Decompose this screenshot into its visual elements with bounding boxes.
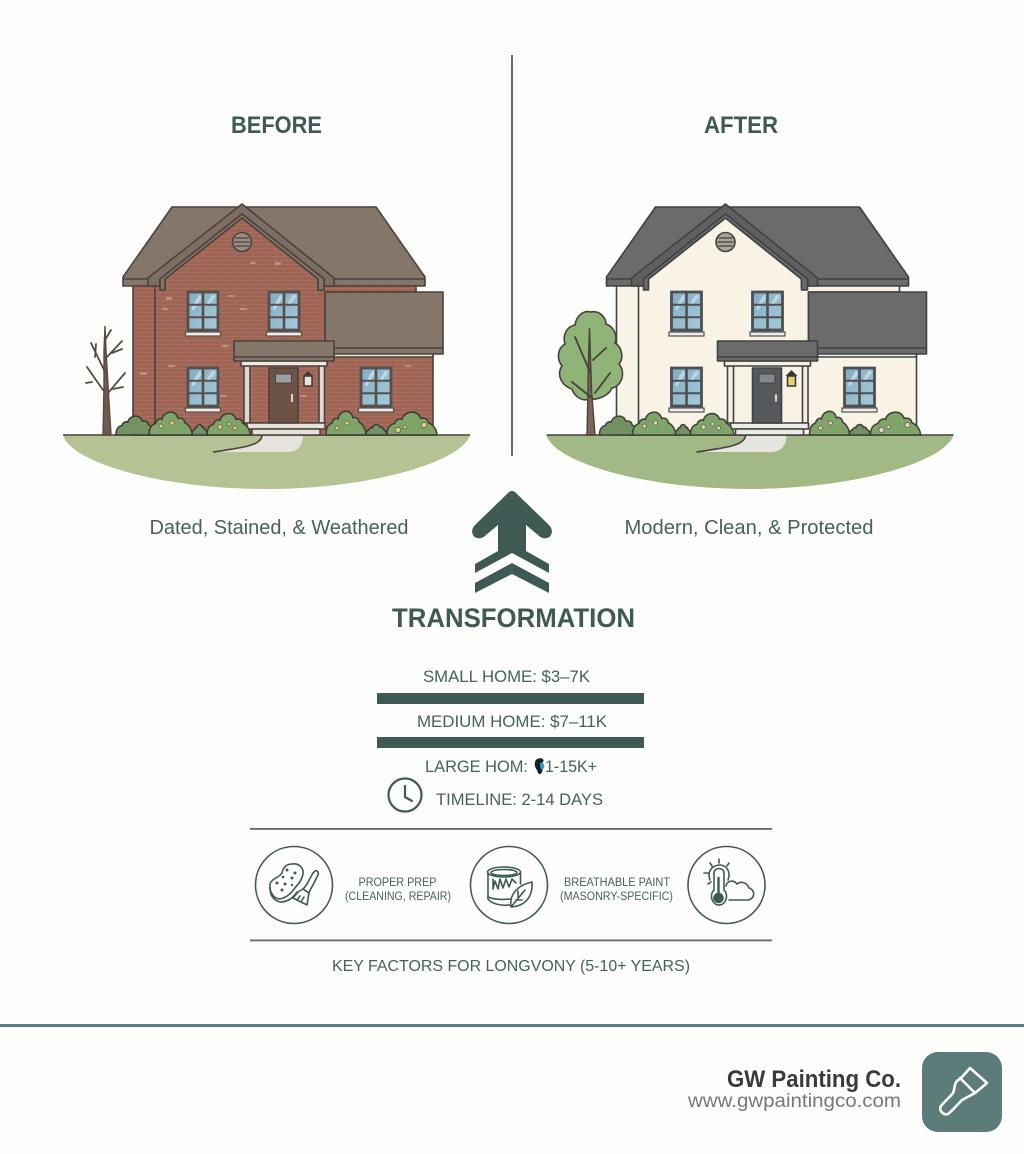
gable trim — [632, 204, 818, 286]
shrub flowers — [159, 421, 427, 433]
shrub flowers — [642, 421, 910, 433]
arrow: upward transformation — [472, 491, 552, 593]
cost: large home: 1-15K+ — [545, 757, 597, 776]
eave line — [606, 278, 908, 280]
walkway — [213, 435, 303, 452]
wall lantern — [303, 371, 313, 386]
walkway — [696, 435, 786, 452]
brick walls — [133, 218, 433, 435]
eave line — [123, 278, 425, 280]
front door — [752, 368, 782, 423]
porch — [234, 341, 334, 435]
gable trim — [148, 204, 334, 286]
leafy tree — [558, 312, 623, 435]
shrubs — [600, 411, 920, 435]
factor text: breathable paint — [560, 877, 673, 903]
footer rule — [0, 1024, 1024, 1027]
before caption: Dated, Stained, & Weathered — [150, 517, 408, 539]
heading: after: AFTER — [704, 112, 778, 139]
factor text: breathable paint: BREATHABLE PAINT — [564, 877, 670, 889]
bar: medium home — [377, 737, 644, 748]
main roof — [123, 207, 425, 286]
porch — [718, 341, 818, 435]
center divider — [511, 55, 513, 456]
factor text: breathable paint: (MASONRY-SPECIFIC) — [560, 891, 673, 903]
brick flecks — [140, 262, 411, 397]
windows — [669, 292, 877, 412]
wall lantern — [786, 370, 798, 386]
rule above factors — [250, 828, 772, 830]
timeline text: TIMELINE: 2-14 DAYS — [436, 790, 603, 809]
icon: paint can and leaf — [470, 846, 548, 924]
main roof — [606, 207, 908, 286]
company website: www.gwpaintingco.com — [687, 1091, 901, 1112]
factor text: proper prep: PROPER PREP — [358, 877, 437, 889]
lawn — [546, 435, 954, 489]
windows — [186, 292, 394, 412]
cost: large home: LARGE HOM: — [425, 757, 528, 776]
company name: GW Painting Co. — [727, 1066, 901, 1093]
front door — [269, 368, 298, 423]
key factors caption: KEY FACTORS FOR LONGVONY (5-10+ YEARS) — [332, 958, 690, 975]
bar: small home — [377, 693, 644, 704]
cost: large home — [425, 757, 597, 776]
attic vent — [716, 232, 735, 252]
garage roof — [325, 292, 443, 357]
cost: medium home: MEDIUM HOME: $7–11K — [417, 712, 608, 731]
bare tree — [86, 326, 125, 435]
icon: sponge and brush — [256, 846, 332, 924]
shrubs — [116, 411, 437, 435]
after caption: Modern, Clean, & Protected — [624, 517, 874, 539]
icon: thermometer, sun and cloud — [688, 846, 765, 924]
heading: before: BEFORE — [231, 112, 322, 139]
rule below factors — [250, 940, 772, 941]
garage roof — [808, 292, 926, 357]
panel: before house illustration — [63, 204, 470, 489]
factor text: proper prep — [345, 877, 451, 903]
transformation title: TRANSFORMATION — [392, 603, 635, 633]
factor text: proper prep: (CLEANING, REPAIR) — [345, 891, 451, 903]
attic vent — [232, 232, 252, 252]
panel: after house illustration — [546, 204, 954, 489]
painted walls — [616, 218, 916, 435]
logo: paint brush badge — [922, 1052, 1002, 1132]
cost: small home: SMALL HOME: $3–7K — [423, 667, 591, 686]
lawn — [63, 435, 470, 489]
icon: clock — [388, 778, 422, 812]
